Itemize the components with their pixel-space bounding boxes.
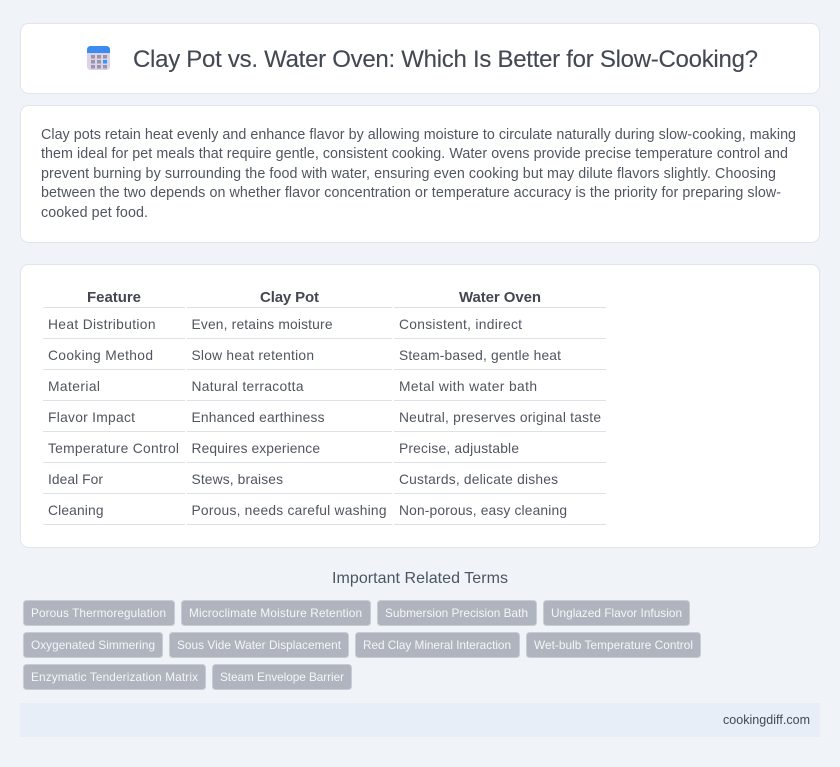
tag <box>544 600 690 626</box>
tag <box>170 632 348 658</box>
panel: comparison table <box>20 264 820 548</box>
intro text <box>41 127 796 221</box>
row: ideal for: Custards, delicate dishes <box>399 472 558 487</box>
row: ideal for: Stews, braises <box>192 472 283 487</box>
intro text: cooked pet food. <box>41 205 148 221</box>
row: cooking method: Steam-based, gentle heat <box>399 348 561 363</box>
row: ideal for: Ideal For <box>48 472 103 487</box>
row: heat distribution: Consistent, indirect <box>399 317 522 332</box>
footer source text: cookingdiff.com <box>723 713 810 727</box>
row: flavor impact: Flavor Impact <box>48 410 135 425</box>
row: material: Natural terracotta <box>192 379 304 394</box>
intro text: prevent burning by surrounding the food with water, ensuring even cooking but may dilute flavors slightly. Choosing <box>41 166 776 182</box>
icon: calendar <box>87 46 110 70</box>
tag <box>526 632 700 658</box>
row: cooking method <box>48 348 561 363</box>
table header: Feature <box>87 289 141 306</box>
tag <box>212 664 352 690</box>
row: temperature control: Precise, adjustable <box>399 441 519 456</box>
row: ideal for <box>48 472 558 487</box>
row: flavor impact: Enhanced earthiness <box>192 410 325 425</box>
tag <box>356 632 520 658</box>
heading: related terms: Important Related Terms <box>332 570 508 587</box>
row: temperature control: Requires experience <box>192 441 320 456</box>
intro text: them ideal for pet meals that require gentle, consistent cooking. Water ovens provide precise temperature control and <box>41 146 788 162</box>
row: cleaning <box>48 503 567 518</box>
footer <box>20 703 820 737</box>
row: material: Metal with water bath <box>399 379 537 394</box>
intro text: Clay pots retain heat evenly and enhance flavor by allowing moisture to circulate naturally during slow-cooking, making <box>41 127 796 143</box>
row: flavor impact: Neutral, preserves original taste <box>399 410 601 425</box>
row: cooking method: Cooking Method <box>48 348 153 363</box>
tag <box>24 664 206 690</box>
tag <box>182 600 370 626</box>
row: heat distribution: Heat Distribution <box>48 317 156 332</box>
panel: introduction <box>20 106 820 242</box>
tag: Wet-bulb Temperature Control <box>534 638 693 652</box>
tag: Submersion Precision Bath <box>385 606 528 620</box>
table header: Water Oven <box>459 289 541 306</box>
row: temperature control: Temperature Control <box>48 441 179 456</box>
tag <box>378 600 536 626</box>
row: material: Material <box>48 379 100 394</box>
row: cleaning: Porous, needs careful washing <box>192 503 386 518</box>
tag <box>24 600 174 626</box>
row: cooking method: Slow heat retention <box>192 348 314 363</box>
row: heat distribution <box>48 317 522 332</box>
intro text: between the two depends on whether flavor concentration or temperature accuracy is the priority for preparing slow- <box>41 185 781 201</box>
panel: header <box>20 24 820 94</box>
tag: Steam Envelope Barrier <box>220 670 344 684</box>
row: cleaning: Cleaning <box>48 503 104 518</box>
related term tags <box>24 600 700 690</box>
row: flavor impact <box>48 410 601 425</box>
table header: Clay Pot <box>260 289 319 306</box>
row: temperature control <box>48 441 519 456</box>
table row lines <box>43 308 606 524</box>
tag: Unglazed Flavor Infusion <box>551 606 682 620</box>
tag: Porous Thermoregulation <box>31 606 166 620</box>
tag: Sous Vide Water Displacement <box>177 638 342 652</box>
title: Clay Pot vs. Water Oven: Which Is Better for Slow-Cooking? <box>133 46 758 73</box>
tag: Oxygenated Simmering <box>31 638 155 652</box>
row: heat distribution: Even, retains moisture <box>192 317 333 332</box>
tag: Enzymatic Tenderization Matrix <box>31 670 198 684</box>
table header <box>87 289 541 306</box>
row: material <box>48 379 537 394</box>
tag: Red Clay Mineral Interaction <box>363 638 511 652</box>
row: cleaning: Non-porous, easy cleaning <box>399 503 567 518</box>
tag: Microclimate Moisture Retention <box>189 606 362 620</box>
tag <box>24 632 162 658</box>
